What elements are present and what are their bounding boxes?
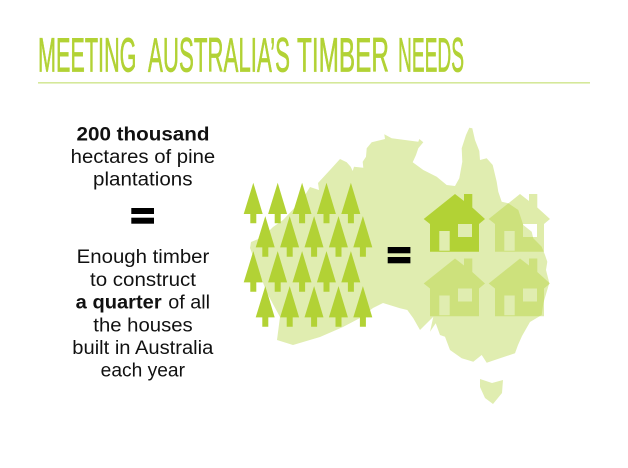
text block: timber outcome: the houses [93,315,193,336]
title: MEETING [38,28,136,82]
text block: timber outcome: built in Australia [72,338,214,359]
pine trees [244,183,372,327]
text block: timber outcome: Enough timber [77,247,210,268]
text block: plantation area [71,125,215,190]
text block: plantation area: plantations [93,170,192,190]
icon: equals sign left [131,208,154,224]
icon: equals sign right [388,247,410,263]
text block: plantation area: 200 thousand [76,125,210,146]
title: TIMBER [297,28,389,82]
text block: timber outcome: each year [101,361,186,382]
text block: timber outcome: a quarter [76,293,162,314]
house: highlighted [424,194,485,252]
text block: timber outcome: of all [168,293,210,314]
house: faded bottom right [489,258,550,316]
map of Australia [250,128,549,404]
house: faded top right [489,194,550,252]
text block: timber outcome [72,247,214,382]
text: NEEDS [398,28,464,82]
title: AUSTRALIA’S [148,28,290,82]
text block: timber outcome: to construct [90,270,197,291]
houses [424,194,550,316]
house: faded bottom left [424,258,485,316]
text block: plantation area: hectares of pine [71,147,215,168]
